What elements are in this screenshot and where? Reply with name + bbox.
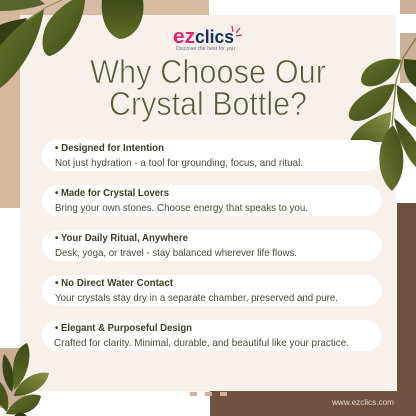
item: Your Daily Ritual, Anywhere: • Your Daily Ritual, Anywhere bbox=[55, 233, 189, 244]
item: Your Daily Ritual, Anywhere: Desk, yoga, or travel - stay balanced wherever life flows. bbox=[55, 248, 297, 259]
leaves: right branch bbox=[349, 38, 416, 191]
item: No Direct Water Contact: • No Direct Water Contact bbox=[55, 278, 174, 289]
item: Made for Crystal Lovers: • Made for Crystal Lovers bbox=[55, 188, 170, 199]
item: Your Daily Ritual, Anywhere bbox=[42, 230, 382, 261]
logo bbox=[173, 26, 242, 52]
item: Designed for Intention: Not just hydration - a tool for grounding, focus, and ritual. bbox=[55, 158, 303, 169]
item: No Direct Water Contact bbox=[42, 275, 382, 306]
item: Designed for Intention: • Designed for Intention bbox=[55, 143, 164, 154]
item: Elegant & Purposeful Design: Crafted for clarity. Minimal, durable, and beautiful like your practice. bbox=[54, 338, 349, 349]
title: Why Choose Our bbox=[90, 53, 326, 90]
leaf behind first pill bbox=[350, 112, 391, 142]
item: Designed for Intention bbox=[42, 140, 382, 171]
item: Elegant & Purposeful Design: • Elegant & Purposeful Design bbox=[55, 323, 192, 334]
leaves: bottom left branch bbox=[0, 343, 49, 416]
item: Made for Crystal Lovers: Bring your own stones. Choose energy that speaks to you. bbox=[55, 203, 308, 214]
website url: www.ezclics.com bbox=[331, 397, 394, 407]
title: Crystal Bottle? bbox=[109, 85, 307, 122]
title bbox=[90, 53, 326, 122]
item: Made for Crystal Lovers bbox=[42, 185, 382, 216]
logo: Discover the best for you bbox=[176, 46, 235, 52]
item: No Direct Water Contact: Your crystals stay dry in a separate chamber, preserved and pure. bbox=[55, 293, 338, 304]
logo: clics bbox=[195, 26, 234, 47]
logo: ez bbox=[173, 26, 195, 48]
leaves: top left branch bbox=[0, 0, 143, 88]
item: Elegant & Purposeful Design bbox=[42, 320, 382, 351]
